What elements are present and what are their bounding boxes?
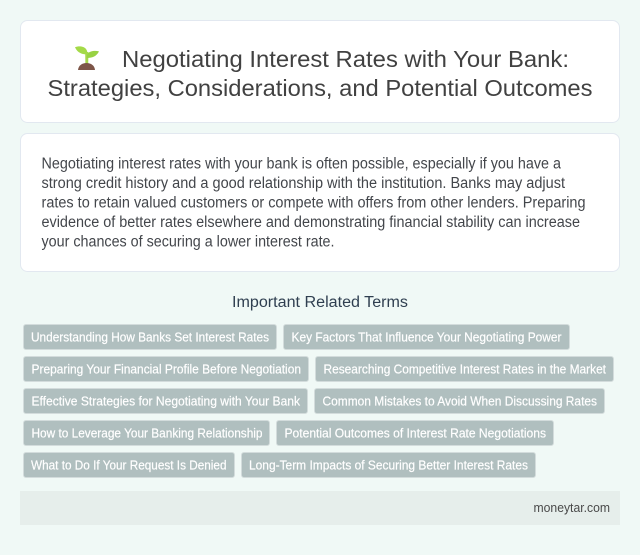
tag: Effective Strategies for Negotiating with Your Bank	[32, 394, 301, 408]
tag	[24, 388, 308, 414]
description text: your chances of securing a lower interest rate.	[42, 234, 334, 250]
icon: sprout	[75, 46, 99, 70]
tag	[24, 452, 234, 478]
title text	[48, 46, 592, 101]
tag	[24, 356, 308, 382]
description text: rates to retain valued customers or compete with offers from other lenders. Preparing	[42, 194, 586, 212]
title text: Strategies, Considerations, and Potential Outcomes	[48, 75, 592, 101]
tag: Key Factors That Influence Your Negotiating Power	[292, 330, 562, 344]
description text: evidence of better rates elsewhere and demonstrating financial stability can increase	[42, 214, 580, 231]
tag: Long-Term Impacts of Securing Better Interest Rates	[249, 458, 528, 472]
description text	[42, 156, 586, 250]
panel: description card	[20, 134, 620, 272]
tag	[316, 356, 614, 382]
tag	[284, 324, 570, 350]
tag: Preparing Your Financial Profile Before Negotiation	[32, 362, 301, 376]
heading: important related terms: Important Related Terms	[232, 294, 408, 311]
title text: Negotiating Interest Rates with Your Bank:	[122, 46, 569, 72]
description text: strong credit history and a good relationship with the institution. Banks may adjust	[42, 175, 566, 192]
tag: Understanding How Banks Set Interest Rates	[31, 330, 269, 344]
tag	[276, 420, 554, 446]
tag: Potential Outcomes of Interest Rate Negotiations	[284, 426, 546, 440]
description text: Negotiating interest rates with your bank is often possible, especially if you have a	[42, 156, 561, 172]
tag: How to Leverage Your Banking Relationship	[32, 426, 263, 440]
footer bar	[20, 491, 620, 525]
tag	[24, 324, 276, 350]
tag: Common Mistakes to Avoid When Discussing Rates	[322, 394, 597, 408]
tag: What to Do If Your Request Is Denied	[31, 458, 227, 472]
tag	[24, 420, 270, 446]
footer source text: moneytar.com	[534, 501, 610, 515]
tag: Researching Competitive Interest Rates in the Market	[324, 362, 606, 376]
tag	[314, 388, 604, 414]
tag	[242, 452, 536, 478]
panel: related term tags	[24, 324, 614, 478]
panel: title card	[20, 20, 620, 122]
